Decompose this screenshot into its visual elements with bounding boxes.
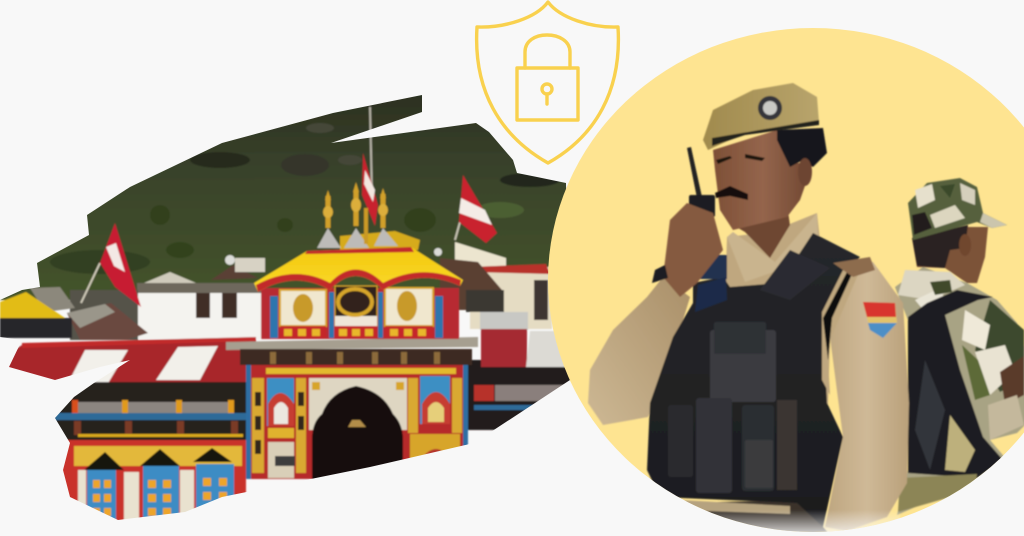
belt: [898, 474, 977, 512]
lower camo: [945, 415, 975, 472]
main officer: [588, 83, 909, 535]
yellow tent left: [0, 292, 72, 338]
shoulder patch: [863, 302, 897, 338]
flag left: [81, 223, 141, 307]
soldier in camouflage: [895, 178, 1024, 515]
left awning: [0, 337, 256, 385]
flag centre: [362, 153, 378, 226]
hillside: [0, 90, 580, 300]
camouflage cap: [908, 178, 1007, 240]
moustache: [715, 186, 748, 200]
shrine walls: [261, 286, 459, 339]
right awning and storey: [468, 329, 573, 430]
tactical vest: [647, 233, 860, 527]
hair: [777, 128, 827, 167]
photo: Badrinath temple in brush-stroke mask: [0, 90, 580, 525]
backpack: [908, 290, 1003, 478]
buildings right: [440, 242, 552, 330]
photo: security personnel: [588, 83, 1024, 535]
left building facade with arches: [62, 440, 246, 525]
shirt collar: [727, 213, 818, 282]
neck: [733, 205, 790, 258]
ear: [798, 158, 812, 186]
yellow roof: [254, 247, 463, 292]
beret: [703, 83, 819, 150]
shirt chest: [725, 213, 860, 405]
temple bell: [348, 420, 366, 427]
beret band: [712, 120, 819, 146]
icon: shield with padlock: [477, 2, 618, 163]
spires: [317, 182, 398, 248]
left arm sleeve: [588, 277, 690, 425]
epaulette: [833, 257, 875, 277]
central facade: [246, 364, 468, 479]
face: [713, 130, 813, 230]
beret badge: [758, 96, 782, 120]
belt band: [680, 500, 790, 514]
bottom fade: [650, 510, 900, 535]
cornice: [226, 337, 478, 365]
soldier torso camouflage: [895, 267, 1024, 515]
hand and radio: [652, 147, 727, 312]
eyes and brow: [716, 154, 765, 164]
flag pole centre: [370, 107, 372, 195]
yellow blob: [548, 28, 1024, 532]
head and neck: [912, 225, 988, 283]
flag right: [455, 175, 497, 243]
pack strap highlight: [915, 360, 945, 470]
buildings left: [30, 248, 442, 340]
right arm and shoulder: [825, 262, 909, 531]
central arch doorway: [312, 386, 403, 480]
left building upper storey: [50, 382, 250, 442]
golden rear roof: [340, 231, 420, 250]
trousers: [677, 500, 830, 535]
